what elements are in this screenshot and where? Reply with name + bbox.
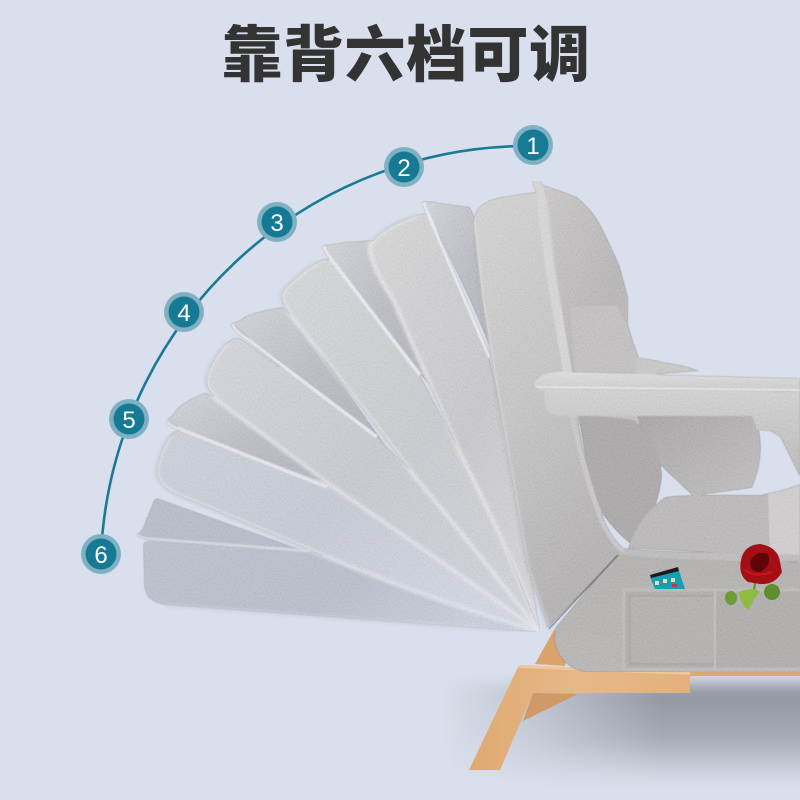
position 3: [257, 202, 297, 242]
lumbar cushion: [578, 414, 662, 545]
cushion rim light: [473, 222, 548, 628]
title: 靠背六档可调: [221, 21, 590, 89]
backrest position 6: [137, 498, 540, 632]
reclining backrest fan: [137, 201, 540, 632]
front backrest cushion: [473, 192, 620, 628]
seat piping: [618, 551, 800, 558]
seat side panel: [768, 484, 800, 556]
position 4: [164, 292, 204, 332]
position 2: [384, 147, 424, 187]
head pillow fold: [570, 305, 640, 372]
position 3: 3: [270, 210, 284, 237]
position 6: [81, 534, 121, 574]
adjustment arc with positions: [81, 125, 553, 574]
position 1: [513, 125, 553, 165]
seat cushion: [628, 484, 800, 558]
cushion shadow line: [549, 555, 618, 629]
position 4: 4: [177, 300, 191, 327]
lower seat base: [554, 553, 800, 672]
position 2: 2: [397, 155, 411, 182]
sofa body: [473, 181, 800, 672]
armrest: [534, 372, 800, 477]
position 5: 5: [122, 407, 136, 434]
position 1: 1: [526, 133, 540, 160]
wooden leg: [469, 630, 800, 770]
arc line: [101, 146, 533, 554]
position 5: [109, 399, 149, 439]
backrest piping: [537, 183, 568, 375]
side arm strap: [636, 358, 700, 376]
backrest position 3: [282, 240, 540, 632]
backrest position 2: [370, 201, 540, 632]
back pillow: [637, 415, 761, 496]
position 6: 6: [94, 542, 108, 569]
floor shadow: [440, 684, 800, 784]
side pocket: [624, 590, 800, 669]
lower piping: [572, 415, 622, 550]
phone in pocket: [650, 567, 685, 589]
backrest position 5: [157, 393, 540, 632]
backrest position 4: [207, 307, 540, 632]
rose: [725, 544, 782, 610]
rear backrest pad: [537, 181, 640, 425]
